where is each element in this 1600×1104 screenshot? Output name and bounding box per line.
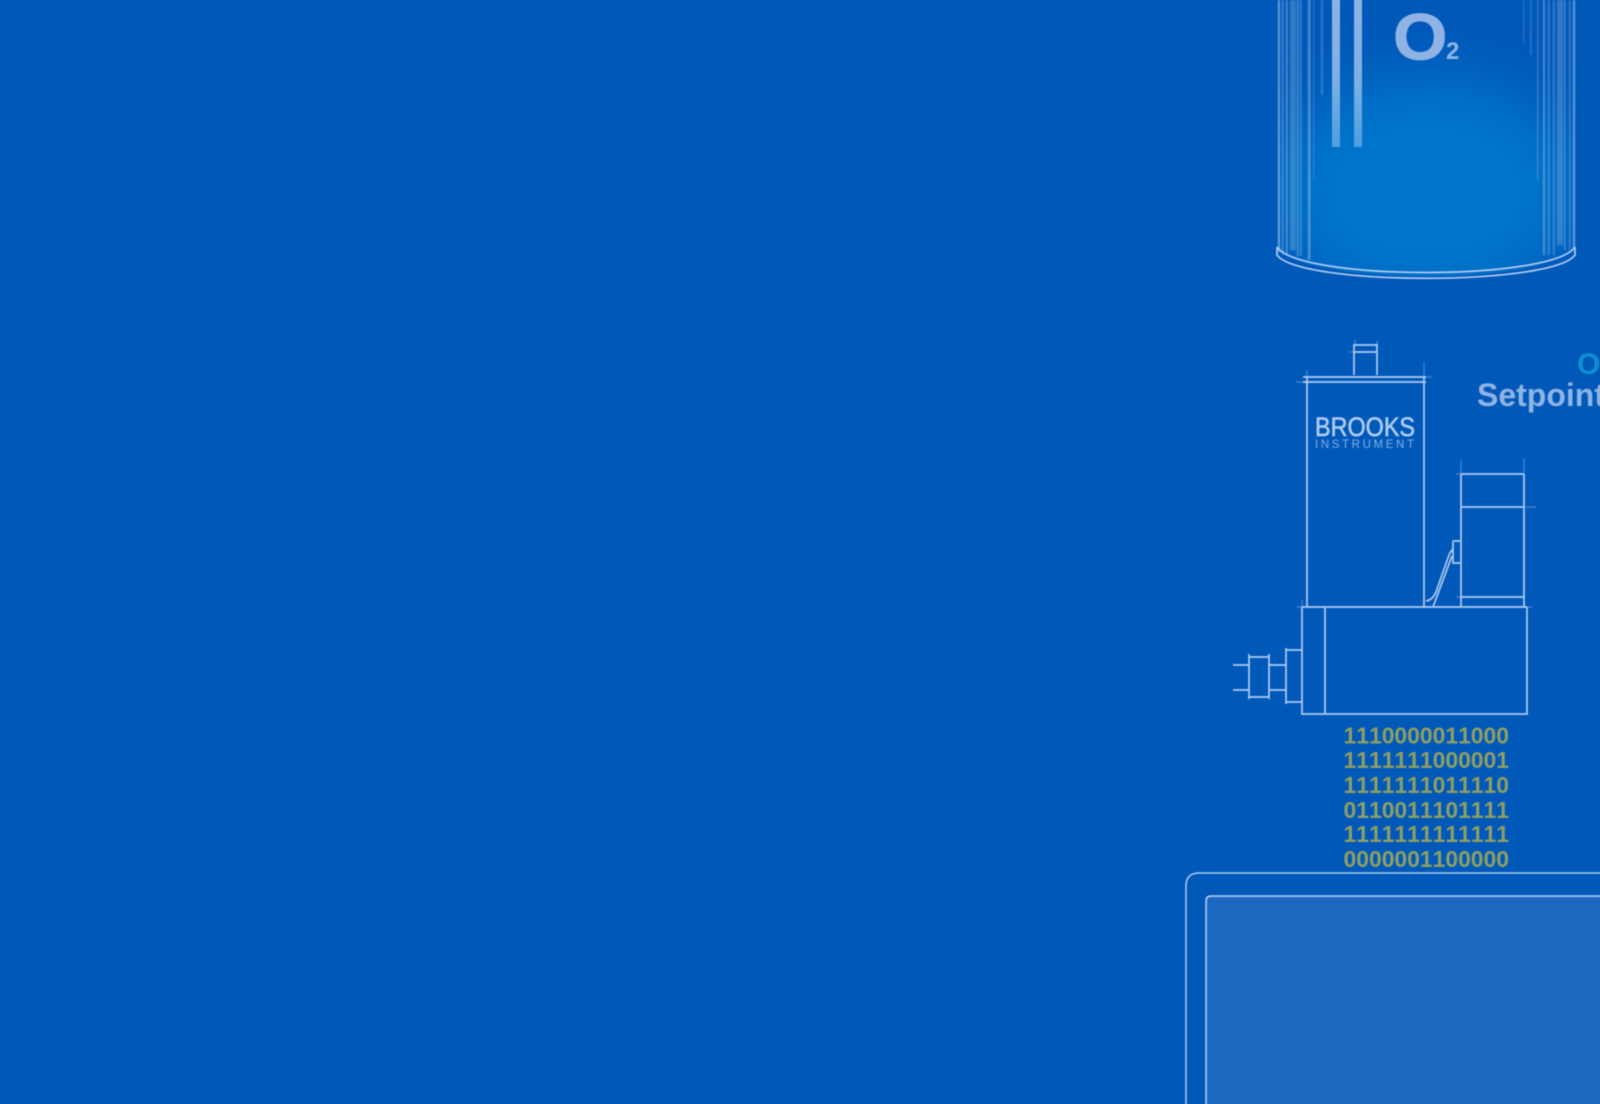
O2 label: O — [1393, 0, 1447, 74]
tank side stripes left — [1278, 0, 1323, 260]
brooks logo — [1315, 412, 1415, 451]
binary signal: 1111111111111 — [1344, 821, 1509, 847]
brooks logo: BROOKS — [1315, 412, 1415, 442]
oxygen tank — [1276, 0, 1576, 305]
tank side stripes right — [1523, 0, 1575, 255]
full page diagram — [1184, 0, 1600, 1104]
bracket and tube — [1426, 541, 1461, 607]
mass flow controller drawing — [1233, 340, 1536, 714]
binary signal: 0110011101111 — [1344, 797, 1509, 823]
tank liquid glow — [1276, 75, 1576, 305]
binary signal: 1110000011000 — [1344, 722, 1509, 748]
monitor bezel — [1186, 873, 1600, 1104]
valve base — [1302, 607, 1527, 714]
side actuator — [1461, 474, 1524, 607]
computer monitor — [1186, 873, 1600, 1104]
O2 label: 2 — [1446, 38, 1459, 65]
brooks logo: INSTRUMENT — [1315, 439, 1414, 451]
left fittings — [1233, 648, 1302, 704]
setpoint label — [1477, 348, 1600, 413]
binary signal: 0000001100000 — [1344, 846, 1509, 872]
tank base rim — [1277, 247, 1575, 278]
small teal glyph: O — [1577, 348, 1600, 381]
monitor screen — [1206, 896, 1600, 1104]
binary signal — [1344, 722, 1509, 872]
top connector — [1354, 345, 1377, 375]
binary signal: 1111111000001 — [1344, 747, 1509, 773]
dip tubes — [1332, 0, 1362, 147]
controller body — [1303, 377, 1426, 607]
binary signal: 1111111011110 — [1344, 772, 1509, 798]
faint crosshair overshoots — [1296, 340, 1536, 607]
